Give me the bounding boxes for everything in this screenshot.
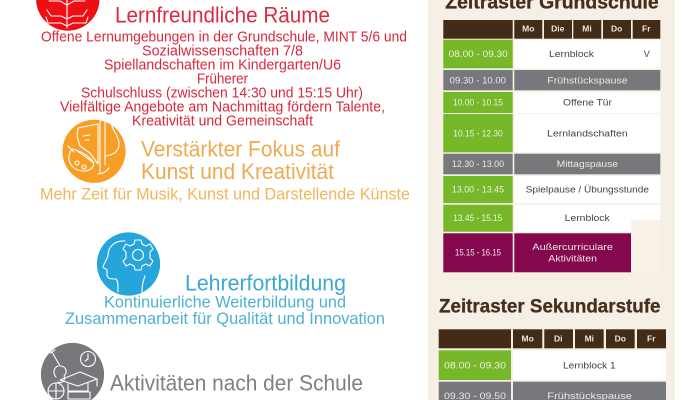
text block: red body: Kreativität und Gemeinschaft <box>132 113 314 130</box>
table header row <box>439 329 666 348</box>
table header row: Mi <box>582 24 592 34</box>
table header row: Die <box>551 24 565 34</box>
heading: Lernfreundliche Räume: Lernfreundliche Räume <box>115 3 330 28</box>
row: 09.30 - 10.00 Frühstückspause <box>443 70 660 90</box>
row: 10.00 - 10.15 Offene Tür <box>443 92 660 113</box>
heading: Lehrerfortbildung: Lehrerfortbildung <box>185 270 346 295</box>
row: 13.45 - 15.15 Lernblock: Lernblock <box>565 213 610 223</box>
row: 15.15 - 16.15 Außercurriculare Aktivitäten: Aktivitäten <box>548 254 597 264</box>
heading: Zeitraster Sekundarstufe: Zeitraster Sekundarstufe <box>439 297 660 318</box>
row: 13.00 - 13.45 Spielpause: 13.00 - 13.45 <box>452 184 504 194</box>
icon: head with gear on blue circle <box>97 232 160 296</box>
icon: guitar, clock, cap and ball on grey circle <box>41 343 104 400</box>
text block: orange body: Mehr Zeit für Musik, Kunst und Darstellende Künste <box>40 186 410 204</box>
text block: red body: Früherer <box>197 71 248 88</box>
text block: red body: Spiellandschaften im Kindergarten/U6 <box>104 57 341 74</box>
text block: red body: Sozialwissenschaften 7/8 <box>142 42 303 60</box>
row: 08.00 - 09.30 Lernblock: 08.00 - 09.30 <box>449 49 508 59</box>
table header row: Mo <box>522 24 534 34</box>
text block: blue body: Kontinuierliche Weiterbildung und <box>104 293 346 311</box>
row: 10.15 - 12.30 Lernlandschaften: 10.15 - 12.30 <box>453 128 503 138</box>
panel: after-school activities <box>41 343 363 400</box>
heading: Verstärkter Fokus auf Kunst und Kreativität: Kunst und Kreativität <box>141 159 334 184</box>
text block: red body: Schulschluss (zwischen 14:30 und 15:15 Uhr) <box>81 85 363 102</box>
row: 13.45 - 15.15 Lernblock <box>443 205 660 272</box>
icon: mask, palette and lyre on orange circle <box>62 120 126 183</box>
row: 09.30 - 10.00 Frühstückspause: 09.30 - 10.00 <box>450 76 506 86</box>
table header row: Fr <box>647 334 656 344</box>
row: 15.15 - 16.15 Außercurriculare Aktivitäten <box>443 233 631 272</box>
table header row: Do <box>615 334 626 344</box>
row: 13.00 - 13.45 Spielpause <box>443 176 660 203</box>
panel: teacher training <box>65 232 385 328</box>
row: 10.00 - 10.15 Offene Tür: 10.00 - 10.15 <box>453 97 503 107</box>
row: 08.00 - 09.30 Lernblock 1 <box>439 350 666 380</box>
row: 13.00 - 13.45 Spielpause: Spielpause / Übungsstunde <box>526 184 649 194</box>
row: 08.00 - 09.30 Lernblock 1: Lernblock 1 <box>563 360 616 370</box>
panel: Zeitraster Grundschule <box>443 0 660 272</box>
row: 10.15 - 12.30 Lernlandschaften <box>443 114 660 152</box>
table header row: Mo <box>522 334 534 344</box>
table header row: Di <box>554 334 563 344</box>
row: 08.00 - 09.30 Lernblock <box>443 40 660 69</box>
text block: blue body <box>65 293 385 328</box>
icon: open book on red circle <box>36 0 100 31</box>
table header row: Do <box>611 24 622 34</box>
row: 10.15 - 12.30 Lernlandschaften: Lernlandschaften <box>547 128 628 138</box>
text block: red body: Vielfältige Angebote am Nachmittag fördern Talente, <box>60 99 385 116</box>
row: 12.30 - 13.00 Mittagspause: 12.30 - 13.00 <box>452 159 504 169</box>
row: 12.30 - 13.00 Mittagspause <box>443 154 660 174</box>
panel: beige timetable background <box>428 0 675 400</box>
heading: Verstärkter Fokus auf Kunst und Kreativität <box>141 137 341 184</box>
panel: Zeitraster Sekundarstufe <box>439 297 666 400</box>
row: 08.00 - 09.30 Lernblock: V <box>644 49 650 59</box>
heading: Aktivitäten nach der Schule: Aktivitäten nach der Schule <box>110 370 363 395</box>
table header row: Mi <box>585 334 594 344</box>
row: 08.00 - 09.30 Lernblock: Lernblock <box>549 49 595 59</box>
text block: blue body: Zusammenarbeit für Qualität und Innovation <box>65 310 385 328</box>
row: 12.30 - 13.00 Mittagspause: Mittagspause <box>557 159 618 169</box>
table header row <box>443 20 660 39</box>
panel: art and creativity <box>40 120 410 204</box>
heading: Verstärkter Fokus auf Kunst und Kreativität: Verstärkter Fokus auf <box>141 137 341 162</box>
row: 15.15 - 16.15 Außercurriculare Aktivitäten: Außercurriculare <box>532 242 613 252</box>
table header row: Fr <box>642 24 651 34</box>
row: 09.30 - 09.50 Frühstückspause <box>439 382 666 400</box>
row: 09.30 - 10.00 Frühstückspause: Frühstückspause <box>547 76 628 86</box>
text block: red body <box>41 28 407 130</box>
row: 10.00 - 10.15 Offene Tür: Offene Tür <box>563 97 612 107</box>
row: 15.15 - 16.15 Außercurriculare Aktivitäten: 15.15 - 16.15 <box>455 248 501 258</box>
text block: red body: Offene Lernumgebungen in der Grundschule, MINT 5/6 und <box>41 28 407 46</box>
row: 13.45 - 15.15 Lernblock: 13.45 - 15.15 <box>453 213 502 223</box>
panel: learning-friendly rooms <box>36 0 407 130</box>
row: 08.00 - 09.30 Lernblock 1: 08.00 - 09.30 <box>444 360 506 370</box>
